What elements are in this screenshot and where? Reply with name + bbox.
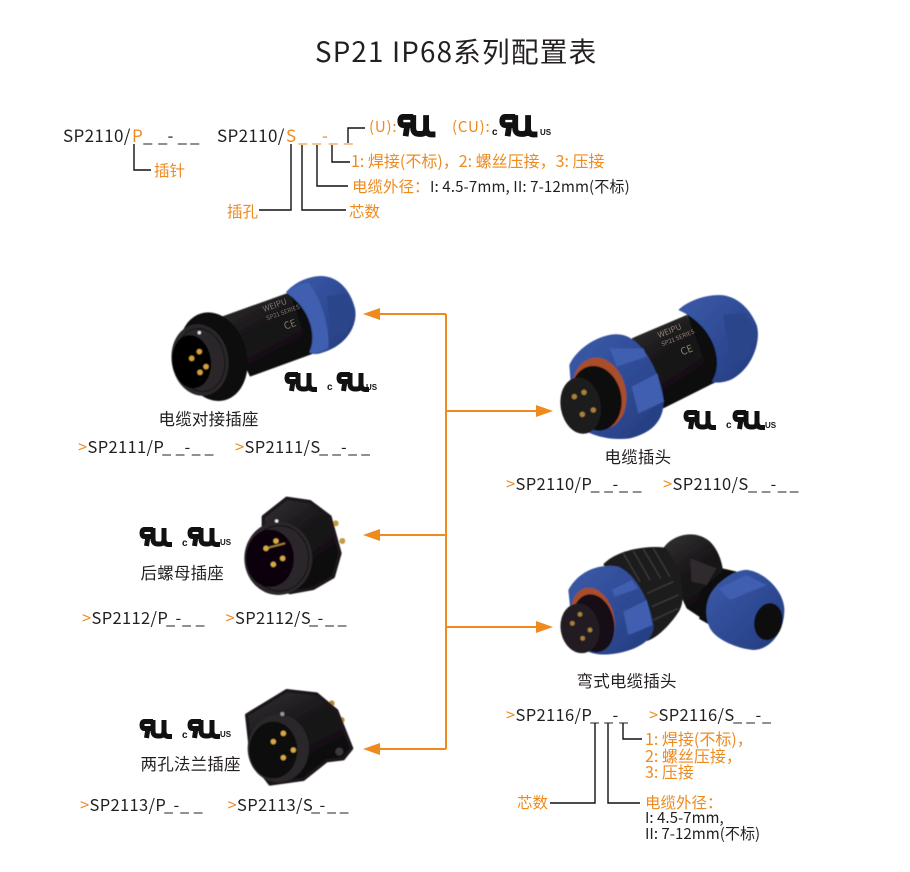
part number P: _ xyxy=(166,605,176,629)
part number S: _ xyxy=(778,471,787,495)
label: cable diameter: 电缆外径： xyxy=(352,175,430,197)
part number P: SP2116/P xyxy=(516,702,592,726)
part number P: > xyxy=(80,792,90,816)
connector photo: rear nut receptacle xyxy=(244,498,345,595)
part number S: SP2112/S xyxy=(235,605,311,629)
part number S: SP2110/S xyxy=(673,471,749,495)
part number P: - xyxy=(174,792,180,816)
part number S: - xyxy=(341,434,347,458)
label: termination options: 3: 压接 xyxy=(645,759,694,783)
part number P: > xyxy=(506,702,516,726)
icon: UL marks xyxy=(287,373,378,393)
icon: UL marks: c xyxy=(182,730,188,741)
part number S: _ xyxy=(338,605,347,629)
plug part number: SP2110/ xyxy=(63,122,131,147)
icon: UL marks: US xyxy=(366,383,378,392)
part number P: _ xyxy=(162,434,172,458)
part number S: _ xyxy=(733,702,743,726)
label: pin: 插针 xyxy=(154,159,185,181)
text: diameter values: I: 4.5-7mm, II: 7-12mm(不标) xyxy=(430,175,630,197)
label: WEIPU SP21 SERIES branding: SP21 SERIES xyxy=(660,327,696,348)
part number S: _ xyxy=(319,434,329,458)
label: CU certification: (CU): xyxy=(452,116,490,137)
label: socket: 插孔 xyxy=(227,200,259,222)
label: termination options: 2: 螺丝压接， xyxy=(645,743,742,767)
part number S: - xyxy=(318,605,324,629)
label: cable diameter: 电缆外径： xyxy=(645,791,723,813)
part number P: > xyxy=(78,434,88,458)
arrow to cable receptacle xyxy=(363,308,446,320)
label: c mark: c xyxy=(492,127,498,138)
arrow to cable plug xyxy=(446,405,553,417)
leader line: termination xyxy=(332,145,350,162)
product name: 电缆插头 xyxy=(604,444,671,468)
socket part number: SP2110/ xyxy=(217,122,285,147)
part number P: _ xyxy=(180,792,190,816)
arrow to rear nut receptacle xyxy=(363,529,446,541)
icon: UL marks: US xyxy=(220,730,232,739)
panel: cable plug xyxy=(506,295,799,495)
part number S: _ xyxy=(790,471,799,495)
label: U certification: (U): xyxy=(369,116,397,137)
orange distribution arrows xyxy=(363,308,553,755)
part number S: _ xyxy=(340,792,349,816)
socket part number: _ xyxy=(312,122,322,147)
part number S: - xyxy=(320,792,326,816)
part number S: > xyxy=(235,434,245,458)
plug part number: P xyxy=(132,122,143,147)
icon: UL marks: c xyxy=(182,538,188,549)
part number P: - xyxy=(612,702,619,726)
leader line: core count xyxy=(302,145,346,210)
plug part number: _ xyxy=(143,122,153,147)
part number S: _ xyxy=(332,434,342,458)
label: WEIPU SP21 SERIES branding: WEIPU xyxy=(261,296,288,315)
part number P: - xyxy=(176,605,182,629)
label: WEIPU SP21 SERIES branding: CE xyxy=(281,314,298,333)
icon: UL marks: US xyxy=(765,421,777,430)
part number P: _ xyxy=(194,792,203,816)
socket part number: S xyxy=(286,122,296,147)
label: core count: 芯数 xyxy=(517,791,549,813)
leader line: core count xyxy=(550,723,595,803)
panel: part number legend xyxy=(63,115,630,222)
label: core count: 芯数 xyxy=(349,200,381,222)
connector photo: cable plug xyxy=(556,295,758,439)
socket part number: _ xyxy=(298,122,308,147)
plug part number: _ xyxy=(158,122,168,147)
part number S: - xyxy=(770,471,777,495)
leader line: socket xyxy=(259,144,291,210)
leader line: cable diameter xyxy=(317,145,348,186)
label: WEIPU SP21 SERIES branding: SP21 SERIES xyxy=(265,302,301,322)
product name: 后螺母插座 xyxy=(140,560,224,584)
leader line: termination xyxy=(623,723,642,739)
part number P: _ xyxy=(619,471,629,495)
title: SP21 IP68系列配置表 xyxy=(315,30,598,70)
plug part number: _ xyxy=(190,122,200,147)
part number S: SP2111/S xyxy=(245,434,321,458)
part number P: _ xyxy=(182,605,192,629)
part number S: _ xyxy=(762,471,771,495)
part number P: SP2112/P xyxy=(92,605,168,629)
label: termination options: 1: 焊接(不标)， xyxy=(645,726,753,750)
label: termination options: 1: 焊接(不标)，2: 螺丝压接，3: 压接 xyxy=(351,148,605,172)
part number P: _ xyxy=(604,702,614,726)
icon: cUL mark xyxy=(502,115,537,136)
part number S: _ xyxy=(361,434,371,458)
product name: 弯式电缆插头 xyxy=(576,668,677,692)
leader line: pin xyxy=(134,144,151,170)
part number P: - xyxy=(612,471,619,495)
part number S: _ xyxy=(309,605,319,629)
icon: UL marks: c xyxy=(327,382,333,393)
arrow to flange receptacle xyxy=(363,743,446,755)
label: WEIPU SP21 SERIES branding: CE xyxy=(678,340,695,358)
socket part number: _ xyxy=(344,122,354,147)
part number S: _ xyxy=(325,605,335,629)
part number P: _ xyxy=(176,434,185,458)
part number S: > xyxy=(226,605,235,629)
text: diameter values: I: 4.5-7mm, xyxy=(645,806,724,828)
part number S: > xyxy=(228,792,237,816)
panel: angled cable plug xyxy=(506,534,786,844)
part number P: _ xyxy=(192,434,201,458)
part number P: _ xyxy=(632,471,642,495)
product name: 两孔法兰插座 xyxy=(140,751,241,775)
icon: UL marks xyxy=(142,720,232,741)
part number S: - xyxy=(756,702,762,726)
label: WEIPU SP21 SERIES branding xyxy=(261,292,307,337)
part number P: _ xyxy=(590,702,600,726)
part number P: _ xyxy=(590,471,600,495)
part number S: _ xyxy=(327,792,337,816)
leader line: certification xyxy=(348,128,365,143)
label: us mark: US xyxy=(540,128,552,137)
part number P: SP2111/P xyxy=(88,434,164,458)
part number S: _ xyxy=(348,434,358,458)
text: diameter values: II: 7-12mm(不标) xyxy=(645,822,760,844)
icon: UL mark xyxy=(400,115,435,136)
part number S: > xyxy=(663,471,673,495)
socket part number: - xyxy=(322,122,328,147)
part number S: _ xyxy=(748,471,758,495)
panel: rear nut receptacle xyxy=(82,498,347,629)
socket part number: _ xyxy=(328,122,338,147)
part number P: - xyxy=(184,434,191,458)
part number P: SP2110/P xyxy=(516,471,592,495)
part number P: > xyxy=(506,471,516,495)
part number P: SP2113/P xyxy=(90,792,166,816)
panel: cable receptacle xyxy=(78,276,378,458)
icon: UL marks: c xyxy=(726,420,732,431)
icon: UL marks: US xyxy=(220,538,232,547)
part number S: SP2116/S xyxy=(659,702,735,726)
part number P: > xyxy=(82,605,92,629)
leader line: cable diameter xyxy=(608,723,640,803)
part number P: _ xyxy=(196,605,205,629)
part number P: _ xyxy=(604,471,614,495)
part number S: _ xyxy=(746,702,756,726)
connector photo: angled cable plug xyxy=(557,534,786,656)
icon: UL marks xyxy=(686,411,777,431)
plug part number: _ xyxy=(178,122,188,147)
connector photo: flange receptacle xyxy=(247,691,352,784)
label: WEIPU SP21 SERIES branding xyxy=(656,317,702,364)
connector photo: cable receptacle xyxy=(166,276,356,409)
part number S: > xyxy=(649,702,659,726)
part number S: SP2113/S xyxy=(237,792,313,816)
part number S: _ xyxy=(311,792,321,816)
label: WEIPU SP21 SERIES branding: WEIPU xyxy=(656,321,683,341)
part number P: _ xyxy=(164,792,174,816)
icon: UL marks xyxy=(142,528,232,549)
part number S: _ xyxy=(762,702,772,726)
panel: flange receptacle xyxy=(80,691,352,816)
part number P: _ xyxy=(204,434,214,458)
part number P: _ xyxy=(619,702,629,726)
arrow to angled plug xyxy=(446,621,553,633)
plug part number: - xyxy=(168,122,174,147)
product name: 电缆对接插座 xyxy=(158,406,259,430)
